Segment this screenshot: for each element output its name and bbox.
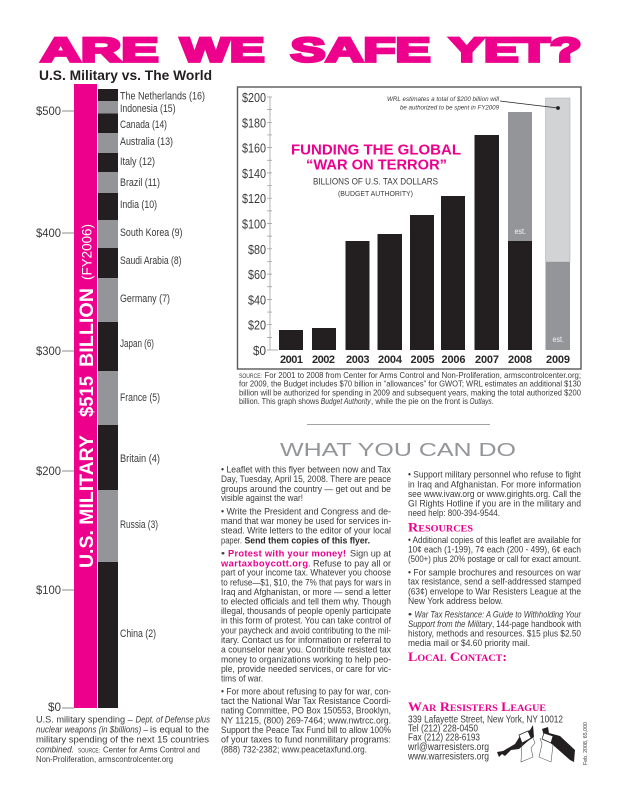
country labels: Saudi Arabia (8) — [120, 255, 182, 267]
chart source note: Outlays. — [470, 396, 494, 406]
panel: funding the global war on terror chart — [238, 87, 581, 369]
chart source note — [239, 370, 581, 406]
stacked countries bar — [98, 89, 118, 708]
U.S. military pink bar — [74, 84, 98, 708]
country labels: Canada (14) — [120, 119, 167, 131]
text block: resources list: tax resistance, send a self-addressed stamped — [408, 577, 581, 587]
text block: resources list: (500+) plus 20% postage or call for exact amount. — [408, 554, 581, 564]
y axis: $120 — [242, 191, 266, 206]
text block: resources list: War Tax Resistance: A Guide to Withholding Your — [414, 609, 582, 619]
callout: WRL estimate: be authorized to be spent in FY2009 — [400, 104, 499, 112]
text block: right column actions: in Iraq and Afghanistan. For more information — [408, 479, 581, 489]
year labels: 2001 — [280, 354, 303, 366]
text block: right column actions: GI Rights Hotline if you are in the military and — [408, 499, 581, 509]
text block: left column actions: nating Committee, PO Box 150553, Brooklyn, — [221, 706, 391, 716]
text block: left column actions: mand that war money be used for services in- — [221, 516, 391, 526]
axis labels and ticks — [36, 104, 74, 714]
bars — [279, 98, 570, 350]
U.S. military pink bar: BILLION — [77, 288, 98, 367]
text block: contact details: Fax (212) 228-6193 — [408, 732, 480, 744]
axis labels and ticks: $200 — [36, 464, 61, 478]
chart heading: “WAR ON TERROR” — [306, 158, 447, 174]
caption: U.S. military spending: is equal to the — [150, 724, 209, 735]
chart heading — [291, 142, 461, 198]
text block: left column actions: groups around the country — get out and be — [221, 484, 391, 494]
y axis: $0 — [253, 343, 266, 358]
text block: left column actions: stead. Write letters to the editor of your local — [221, 526, 391, 536]
caption: U.S. military spending: U.S. military spending – — [36, 714, 133, 725]
text block: left column actions: (888) 732-2382; www.peacetaxfund.org. — [221, 744, 367, 754]
country labels: Australia (13) — [120, 136, 173, 148]
country labels: India (10) — [120, 199, 157, 211]
text block: right column actions — [408, 470, 581, 518]
y axis: $200 — [242, 90, 266, 105]
text block: right column actions: see www.ivaw.org or www.girights.org. Call the — [408, 489, 581, 499]
chart source note: billion. This graph shows — [239, 396, 320, 406]
text block: left column actions: of your taxes to fund nonmilitary programs: — [221, 735, 391, 745]
y axis: $160 — [242, 141, 266, 156]
text block: resources list: New York address below. — [408, 596, 503, 606]
text block: left column actions: • Leaflet with this flyer between now and Tax — [221, 464, 391, 474]
text block: resources list: 10¢ each (1-199), 7¢ each (200 - 499), 6¢ each — [408, 545, 581, 555]
text block: left column actions: . Refuse to pay all or — [308, 558, 391, 568]
text block: contact details: 339 Lafayette Street, New York, NY 10012 — [408, 714, 563, 726]
year labels: 2008 — [508, 354, 532, 366]
year labels — [280, 354, 570, 366]
title: SAFE — [290, 32, 430, 70]
y axis: $100 — [242, 216, 266, 232]
y axis: $140 — [242, 166, 266, 181]
U.S. military pink bar: (FY2006) — [80, 224, 94, 280]
text block: left column actions: part of your income tax. Whatever you choose — [221, 568, 391, 578]
text block: left column actions: wartaxboycott.org — [220, 558, 308, 568]
caption: U.S. military spending: Dept. of Defense plus — [136, 714, 211, 724]
year labels: 2006 — [442, 354, 466, 366]
text block: left column actions: illegal, thousands of people openly participate — [221, 606, 391, 616]
title — [40, 32, 582, 70]
text block: right column actions: need help: 800-394-9544. — [408, 508, 500, 518]
country labels: Germany (7) — [120, 293, 170, 305]
chart heading: (BUDGET AUTHORITY) — [338, 189, 413, 198]
chart source note: For 2001 to 2008 from Center for Arms Control and Non-Proliferation, armscontrolcenter.org; — [264, 370, 581, 380]
country labels: Brazil (11) — [120, 177, 160, 189]
text block: left column actions: Sign up at — [350, 549, 391, 559]
text block: left column actions: • — [221, 549, 225, 559]
text block: left column actions: tims of war. — [221, 674, 263, 684]
text block: left column actions: paper. — [221, 535, 242, 545]
year labels: 2005 — [410, 354, 434, 366]
text block: left column actions: your paycheck and avoid contributing to the mil- — [221, 625, 391, 635]
text block: left column actions: in this form of protest. You can take control of — [221, 616, 391, 626]
text block: left column actions: Day, Tuesday, April 15, 2008. There are peace — [221, 474, 391, 484]
axis labels and ticks: $0 — [48, 700, 61, 714]
U.S. military pink bar: U.S. MILITARY — [77, 435, 98, 568]
chart source note: , while the pie on the front is — [371, 396, 469, 406]
title: YET? — [450, 32, 582, 70]
text block: left column actions: Send them copies of this flyer. — [244, 535, 370, 545]
country labels: Britain (4) — [120, 453, 160, 465]
text block: left column actions: ple, provide needed services, or care for vic- — [221, 664, 391, 674]
text block: resources list: • Additional copies of this leaflet are available for — [408, 535, 581, 545]
text block: contact details: www.warresisters.org — [407, 752, 489, 762]
text block: contact details: wrl@warresisters.org — [407, 742, 489, 753]
text block: contact details — [407, 714, 563, 762]
caption: U.S. military spending: nuclear weapons (in $billions) – — [36, 724, 148, 734]
caption: U.S. military spending: SOURCE: — [78, 748, 100, 754]
country labels: Russia (3) — [120, 519, 158, 531]
country labels: France (5) — [120, 392, 160, 404]
text block: left column actions: • Write the President and Congress and de- — [221, 506, 391, 516]
icon: broken rifle — [497, 725, 575, 762]
heading: what you can do: WHAT YOU CAN DO — [280, 439, 516, 460]
year labels: 2009 — [546, 354, 570, 366]
subtitle: U.S. Military vs. The World — [39, 67, 212, 83]
print date note: Feb. 2008, 65,000 — [583, 722, 589, 765]
country labels: China (2) — [120, 628, 156, 640]
callout: WRL estimate — [387, 96, 560, 112]
year labels: 2004 — [378, 354, 403, 366]
year labels: 2007 — [475, 354, 499, 366]
text block: resources list: • — [408, 609, 412, 619]
text block: left column actions: a counselor near you. Contribute resisted tax — [221, 645, 391, 655]
caption: U.S. military spending: Center for Arms Control and — [103, 744, 200, 754]
text block: left column actions: to refuse—$1, $10, the 7% that pays for wars in — [221, 577, 391, 587]
caption: U.S. military spending: Non-Proliferation, armscontrolcenter.org — [36, 754, 173, 764]
y axis: $20 — [248, 318, 266, 333]
text block: resources list: (63¢) envelope to War Resisters League at the — [408, 586, 581, 596]
country labels: South Korea (9) — [120, 227, 182, 239]
text block: resources list — [408, 535, 582, 648]
text block: left column actions — [220, 464, 391, 754]
text block: contact details: Tel (212) 228-0450 — [408, 724, 478, 734]
text block: left column actions: Iraq and Afghanistan, or more — send a letter — [221, 587, 391, 597]
country labels: Indonesia (15) — [120, 103, 176, 115]
chart heading: FUNDING THE GLOBAL — [291, 142, 461, 158]
text block: left column actions: Protest with your money! — [228, 549, 346, 559]
title: WE — [180, 32, 264, 70]
text block: left column actions: tact the National War Tax Resistance Coordi- — [221, 696, 391, 706]
axis labels and ticks: $100 — [36, 583, 61, 597]
year labels: 2002 — [312, 354, 335, 366]
country labels: Japan (6) — [120, 338, 154, 350]
text block: left column actions: Support the Peace Tax Fund bill to allow 100% — [221, 725, 391, 735]
text block: resources list: • For sample brochures and resources on war — [408, 567, 581, 577]
est. labels: est. — [514, 226, 526, 236]
text block: left column actions: to elected officials and tell them why. Though — [221, 596, 391, 606]
y axis: $180 — [242, 115, 266, 130]
country labels: The Netherlands (16) — [120, 90, 205, 102]
text block: resources list: history, methods and resources. $15 plus $2.50 — [408, 629, 581, 639]
y axis: $80 — [248, 242, 266, 257]
caption: U.S. military spending — [36, 714, 211, 764]
axis labels and ticks: $400 — [36, 226, 61, 240]
heading: resources: Resources — [408, 520, 473, 534]
text block: left column actions: visible against the war! — [221, 493, 303, 503]
year labels: 2003 — [346, 354, 370, 366]
callout: WRL estimate: WRL estimates a total of $200 billion will — [387, 96, 500, 103]
panel: U.S. military vs the world bar chart — [36, 84, 205, 714]
text block: left column actions: money to organizations working to help peo- — [221, 654, 391, 664]
axis labels and ticks: $300 — [36, 344, 61, 358]
chart heading: BILLIONS OF U.S. TAX DOLLARS — [313, 176, 438, 186]
heading: local contact: Local Contact: — [408, 650, 507, 664]
est. labels — [514, 226, 564, 344]
text block: resources list: media mail or $4.60 priority mail. — [408, 638, 530, 648]
text block: left column actions: NY 11215, (800) 269-7464; www.nwtrcc.org. — [221, 715, 391, 725]
caption: U.S. military spending: combined. — [36, 744, 74, 756]
country labels: Italy (12) — [120, 156, 155, 168]
title: ARE — [40, 32, 158, 70]
y axis: $60 — [248, 267, 266, 282]
text block: right column actions: • Support military personnel who refuse to fight — [408, 470, 581, 480]
text block: resources list: , 144-page handbook with — [492, 619, 581, 629]
chart source note: SOURCE: — [239, 373, 262, 380]
y axis: $40 — [248, 292, 266, 307]
text block: left column actions: itary. Contact us for information or referral to — [221, 635, 391, 645]
text block: resources list: Support from the Military — [408, 619, 493, 629]
country labels — [120, 90, 205, 640]
heading: war resisters league: War Resisters League — [408, 700, 546, 714]
axis labels and ticks: $500 — [36, 104, 61, 118]
text block: left column actions: • For more about refusing to pay for war, con- — [221, 687, 391, 697]
y axis — [242, 90, 278, 358]
est. labels: est. — [552, 334, 564, 344]
chart source note: Budget Authority — [321, 396, 371, 406]
U.S. military pink bar: $515 — [77, 376, 98, 417]
caption: U.S. military spending: military spending of the next 15 countries — [36, 734, 209, 745]
